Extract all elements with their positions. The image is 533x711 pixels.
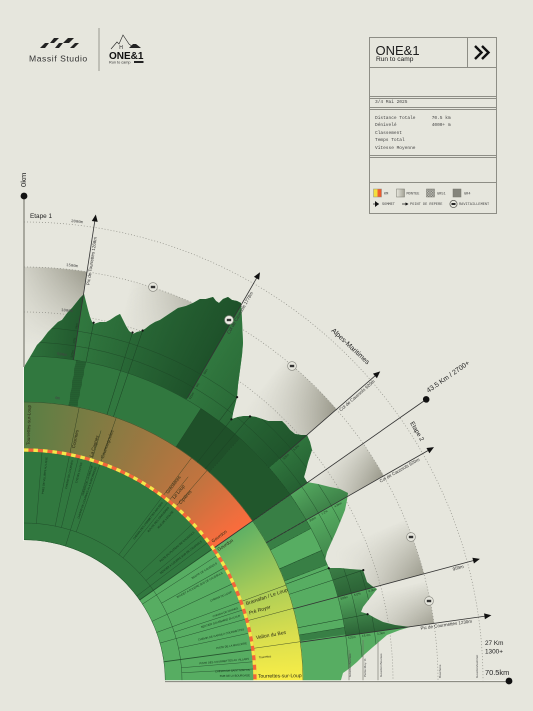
street names: SENTIER A COUDRE SUD DE CAUSSOLS (159, 539, 203, 575)
legend: GR4: GR4 (464, 192, 470, 196)
km course track (24, 450, 255, 681)
arrow: Col 1778m (185, 271, 263, 399)
segment stats on spokes: 12% (72, 337, 77, 344)
street names: CHEMIN DE LA MARCHE (81, 465, 94, 496)
arrow: 959m (293, 556, 481, 612)
logo: ONE&1 Run to camp (109, 35, 144, 64)
grey elevation shadow wedges (24, 267, 434, 626)
heading: ONE&1: ONE&1 (376, 43, 420, 58)
legend: GR51 (426, 189, 446, 197)
axis labels: 1300+ (485, 648, 503, 656)
axis labels: Etape 1 (30, 213, 52, 220)
legend: GR51: GR51 (437, 192, 446, 196)
course place names (26, 404, 302, 680)
course ring dividers (70, 408, 300, 648)
segment stats on spokes: 599m (340, 595, 349, 601)
legend: KM (374, 189, 388, 197)
street names: CHEMIN DES COMBETTES ROUGES (132, 501, 164, 540)
elevation labels: 500m (57, 353, 67, 358)
row divider (370, 107, 496, 108)
bottom vertical labels: Gourdon Bourses (379, 653, 383, 677)
mountain profile base and segments (24, 222, 484, 680)
icon: ravito 3 (288, 362, 296, 370)
segment stats on spokes: 6.5% (292, 444, 300, 451)
street names: PRES DE VILLIERS AU LISSE (41, 457, 49, 494)
course place names: Tourrettes-sur-Loup (258, 673, 302, 680)
arrow: Col 920m south (265, 445, 435, 545)
street names: SENTIER GOURMAND DU LOUP (200, 614, 241, 629)
bottom vertical labels: Gourdon/sommet (475, 655, 479, 678)
bottom vertical labels: Gourdon Bourses (348, 653, 352, 677)
axis labels: 43.5 Km / 2700+ (426, 360, 471, 395)
street names: CHEMIN DE COURNES (64, 460, 74, 489)
segment stats on spokes: 525m (70, 349, 75, 358)
segment stats on spokes: 325m (282, 452, 290, 461)
arrow: Col 920m north (278, 369, 382, 461)
legend: GR4 (453, 189, 470, 197)
street names: PISTE DU PLATEAU DE CAUSSOLS (159, 530, 195, 563)
date: 3/4 Mai 2025 (375, 100, 407, 104)
shading on summit zone (32, 295, 408, 636)
street names: RUE DE LA BOURGADE (220, 673, 250, 678)
spoke labels: Pic de Tourrettes 1268m (85, 236, 98, 286)
legend (373, 188, 490, 208)
legend: RAVITAILLEMENT: RAVITAILLEMENT (459, 203, 490, 207)
summit tick spokes with dots (85, 321, 369, 629)
spoke labels (85, 236, 473, 631)
bottom vertical labels: Bouchons (438, 664, 442, 678)
axis labels: 70.5km (485, 668, 509, 677)
course place names: Gourdon (210, 529, 228, 544)
segment stats on spokes: 5% (195, 382, 201, 388)
axis labels (19, 173, 509, 677)
legend: MONTEE (396, 189, 419, 197)
street names: ROUTE DE CAUSSOLS (191, 561, 218, 580)
axis labels: Alpes-Maritimes (330, 327, 371, 367)
elevation labels: 1000m (61, 309, 74, 314)
gradient course ring (24, 402, 304, 680)
street names: CHEMIN DE SAINT-MARTIN (215, 668, 250, 673)
inner street dividers (36, 451, 255, 673)
elevation labels: 1500m (66, 264, 79, 269)
chevron cell divider (467, 38, 468, 67)
segment stats on spokes (70, 322, 386, 640)
street names (41, 457, 250, 678)
course place names: Vallon du Bes (256, 630, 287, 641)
legend: SOMMET: SOMMET (382, 203, 396, 207)
course place names: Courmegoules (100, 429, 115, 459)
row divider (370, 157, 496, 158)
course place names: Le Loup (171, 483, 186, 500)
course place names: Pré Royer (248, 604, 272, 617)
hatched strip (24, 379, 326, 681)
axes (21, 193, 512, 684)
hatched block GR51 stage 1 (24, 379, 326, 681)
icon: ravito 1 (149, 283, 157, 291)
axis labels: 0km (19, 173, 28, 187)
legend: POINT DE REPERE: POINT DE REPERE (410, 203, 442, 207)
street names: ROUTE DES GRAVIERES (146, 506, 170, 533)
subheading: Run to camp (376, 56, 413, 62)
row divider (370, 96, 496, 97)
dark block (24, 379, 326, 681)
segment stats on spokes: 5.0% (354, 591, 361, 597)
dotted elevation arcs (24, 222, 483, 681)
logo divider (98, 28, 100, 71)
street names: CHEMIN DE GARDE A COURMETTES (198, 627, 245, 642)
legend: RAVITAILLEMENT (450, 200, 490, 208)
green profile stage 2 (24, 294, 410, 681)
spoke labels: Col de Caussols 920m (338, 379, 376, 412)
course place names: La Cagnes (89, 434, 100, 458)
hatched block stage 2 (24, 379, 326, 681)
axis labels: 27 Km (485, 640, 503, 647)
course place names: Tourrettes-sur-Loup (26, 404, 32, 445)
spoke labels: Col de Caussols 1778m (226, 291, 254, 335)
segment stats on spokes: 350m (308, 515, 317, 523)
logo: Massif Studio: Massif Studio (29, 54, 88, 64)
course place names: Tourrettes (259, 654, 272, 659)
segment stats on spokes: 8km (202, 368, 209, 375)
elevation labels: 2000m (71, 220, 84, 225)
axis labels: Etape 2 (408, 420, 425, 443)
panel: race info card (369, 37, 497, 214)
legend: POINT DE REPERE (402, 202, 442, 207)
street names: CHEMIN DE FANNES (212, 606, 239, 618)
row divider (370, 109, 496, 110)
icon: ravito 5 (425, 597, 433, 605)
street names: RUE DE L'EGLISE (157, 510, 175, 529)
row divider (370, 182, 496, 183)
legend: SOMMET (373, 201, 396, 207)
row divider (370, 155, 496, 156)
course place names: Gréolières (165, 474, 182, 495)
upper segment dividers (176, 408, 345, 635)
segment stats on spokes: 0km (74, 322, 79, 329)
street names: PISTE DES COURMETTES AU VILLARS (199, 657, 249, 665)
street names: CHEMIN DU FER (74, 462, 83, 484)
arrow: kilometre 43.5 line (211, 395, 431, 551)
bottom vertical labels: Pente Moy. % (363, 658, 367, 677)
arrow spokes (70, 214, 492, 645)
course place names: Gourdon (216, 538, 234, 552)
hatched block 66 degrees (24, 379, 326, 681)
logo: ONE&1 Run to camp: ONE&1 (109, 51, 144, 62)
ring arcs (24, 327, 378, 681)
spoke labels: 959m (452, 564, 464, 572)
course place names: Cipières (178, 489, 193, 505)
segment stats on spokes: 3.2km (377, 631, 386, 636)
logo: ONE&1 Run to camp: Run to camp (109, 60, 131, 64)
green profile stage 1 (24, 294, 312, 600)
street names: PISTE DE LA MOULIERE (216, 641, 247, 650)
icon: ravito 2 (225, 316, 233, 324)
logo: Massif Studio (29, 38, 88, 64)
course place names: Bramafan / Le Loup (245, 587, 289, 607)
row divider (370, 98, 496, 99)
street names: CHEMIN DU LOUP (209, 590, 233, 603)
hatched block 80 degrees (24, 379, 326, 681)
segment stats on spokes: 625m (188, 391, 195, 400)
header divider lines (370, 67, 496, 68)
icon: double chevron (474, 45, 490, 60)
bottom vertical labels (348, 653, 479, 678)
legend: MONTEE: MONTEE (406, 192, 419, 196)
street names: BAUDET A COUDRE SUD DE CAUSSOLS (176, 571, 223, 599)
segment stats on spokes: 6.0km (368, 587, 377, 593)
ravito icons (149, 283, 433, 605)
stats list: Distance Totale 70.5 km Dénivelé 4000+ m Classement Temps Total Vitesse Moyenne (375, 116, 451, 151)
spoke labels: Pic de Courmettes 1230m (420, 619, 473, 631)
logo: ONE&1 Run to camp: H (119, 45, 123, 51)
arrow: Pic de Tourrettes (70, 214, 99, 360)
legend: KM: KM (384, 192, 388, 196)
segment stats on spokes: 16.4% (362, 633, 371, 638)
spoke labels: Col de Caussols 920m (379, 457, 421, 484)
segment stats on spokes: 525m (348, 635, 356, 640)
elevation labels: 0m (55, 397, 61, 402)
segment stats on spokes: 7.2% (320, 509, 329, 516)
course place names: Courmes (71, 429, 80, 449)
street names: CHEMIN DE COURMES A LA MARONNIERE (76, 466, 98, 519)
bottom extensions of summit arcs (349, 640, 378, 681)
arrow: Pic de Courmettes (300, 612, 492, 645)
segment stats on spokes: 4.9km (333, 501, 343, 509)
icon: ravito 4 (407, 533, 415, 541)
elevation labels (55, 220, 84, 402)
